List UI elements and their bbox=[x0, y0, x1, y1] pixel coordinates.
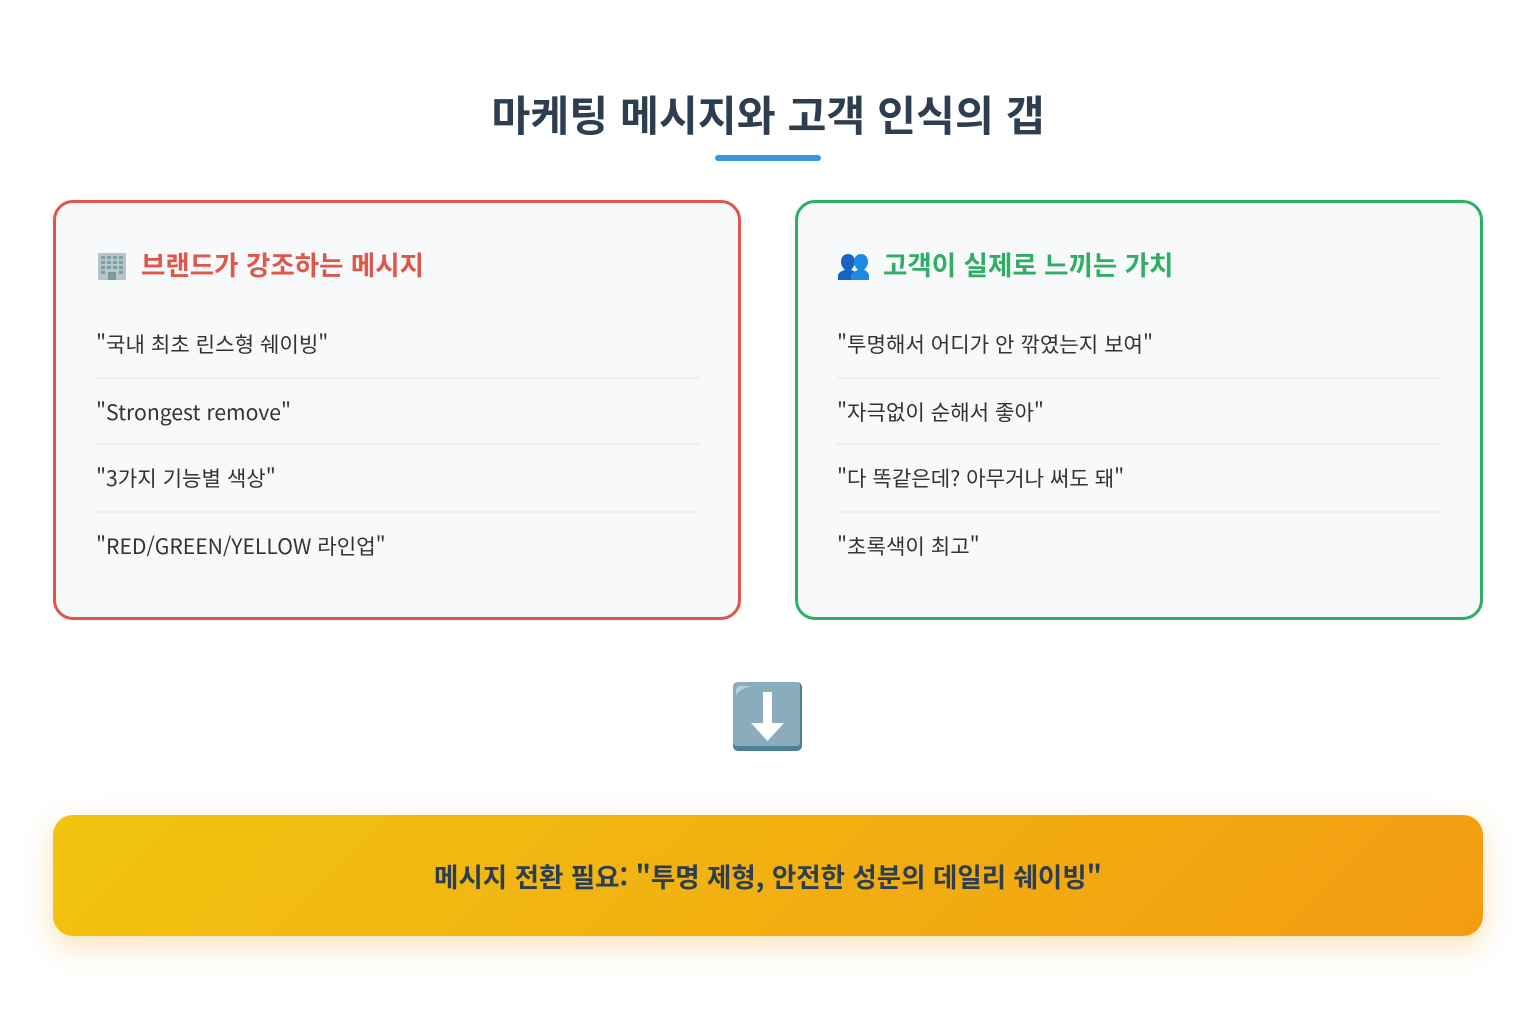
panel: customer value bbox=[795, 200, 1483, 620]
customer item 3: "다 똑같은데? 아무거나 써도 돼" bbox=[837, 462, 1124, 493]
brand item 2: "Strongest remove" bbox=[96, 396, 291, 427]
icon: two people bbox=[838, 254, 869, 280]
brand item 1: "국내 최초 린스형 쉐이빙" bbox=[96, 328, 328, 359]
callout text: 메시지 전환 필요: "투명 제형, 안전한 성분의 데일리 쉐이빙" bbox=[434, 856, 1102, 895]
callout bar bbox=[53, 815, 1483, 936]
arrow: down bbox=[733, 682, 802, 751]
brand item 3: "3가지 기능별 색상" bbox=[96, 462, 276, 493]
customer item 2: "자극없이 순해서 좋아" bbox=[837, 396, 1044, 427]
panel heading: customer: 고객이 실제로 느끼는 가치 bbox=[883, 244, 1173, 283]
title underline bbox=[715, 155, 821, 161]
customer item 4: "초록색이 최고" bbox=[837, 530, 980, 561]
panel heading: brand: 브랜드가 강조하는 메시지 bbox=[141, 244, 424, 283]
brand item 4: "RED/GREEN/YELLOW 라인업" bbox=[96, 530, 386, 561]
title: 마케팅 메시지와 고객 인식의 갭 bbox=[491, 83, 1045, 144]
customer item 1: "투명해서 어디가 안 깎였는지 보여" bbox=[837, 328, 1153, 359]
icon: office building bbox=[98, 253, 126, 280]
panel: brand message bbox=[53, 200, 741, 620]
